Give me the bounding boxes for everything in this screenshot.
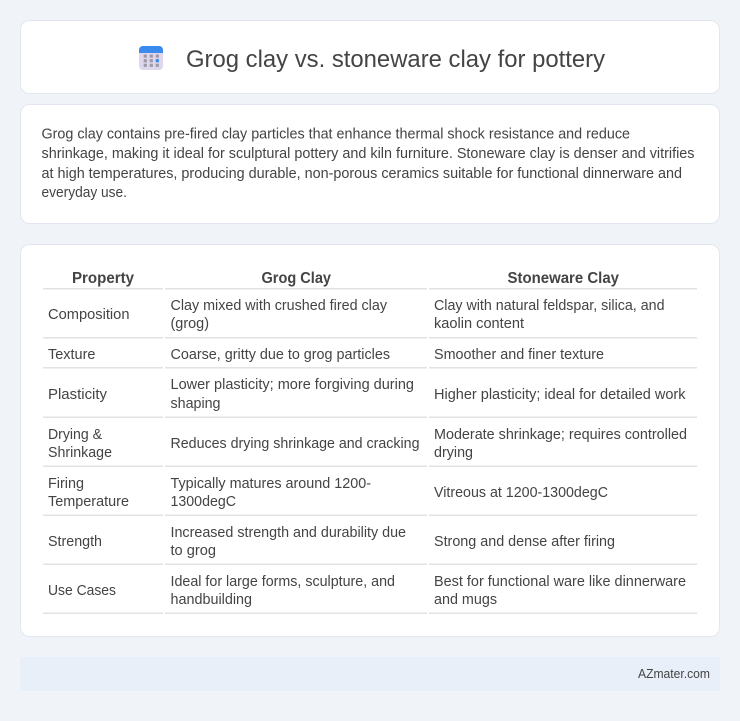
row: texture: Texture (48, 347, 96, 363)
row: firing temperature: Temperature (48, 494, 129, 510)
row: composition (48, 298, 664, 332)
row: drying and shrinkage: drying (434, 445, 473, 461)
row: drying and shrinkage (48, 427, 687, 461)
footer (20, 657, 720, 691)
row: composition: Composition (48, 307, 130, 323)
row: drying and shrinkage: Reduces drying shrinkage and cracking (170, 436, 420, 452)
row: firing temperature: Typically matures around 1200- (170, 476, 371, 492)
table row lines (43, 288, 697, 614)
row: plasticity (48, 377, 686, 412)
row: plasticity: Higher plasticity; ideal for detailed work (434, 387, 686, 403)
row: use cases: handbuilding (170, 592, 252, 608)
table header row: Stoneware Clay (508, 270, 619, 287)
panel: intro text: everyday use. (42, 185, 127, 201)
row: drying and shrinkage: Moderate shrinkage; requires controlled (434, 427, 687, 443)
row: use cases (48, 574, 686, 608)
row: composition: Clay with natural feldspar, silica, and (434, 298, 664, 314)
panel: title card (20, 20, 720, 94)
icon: calendar (139, 46, 163, 70)
panel: intro text: at high temperatures, producing durable, non-porous ceramics suitable for functional dinnerware and (42, 166, 682, 182)
row: plasticity: shaping (170, 396, 220, 412)
row: drying and shrinkage: Shrinkage (48, 445, 112, 461)
table header row (72, 270, 619, 287)
row: firing temperature (48, 476, 608, 510)
row: strength: Strength (48, 534, 102, 550)
footer: AZmater.com (638, 667, 710, 681)
row: texture: Smoother and finer texture (434, 347, 604, 363)
row: strength (48, 525, 615, 559)
row: composition: (grog) (170, 316, 209, 332)
row: strength: Increased strength and durability due (170, 525, 406, 541)
row: composition: kaolin content (434, 316, 524, 332)
row: strength: Strong and dense after firing (434, 534, 615, 550)
row: use cases: Use Cases (48, 583, 116, 599)
title: Grog clay vs. stoneware clay for pottery (186, 46, 605, 73)
row: firing temperature: Vitreous at 1200-1300degC (434, 485, 608, 501)
table header row: Property (72, 270, 134, 287)
panel: intro text: shrinkage, making it ideal for sculptural pottery and kiln furniture. Stoneware clay is denser and vitrifies (42, 146, 694, 162)
table header row: Grog Clay (262, 270, 331, 287)
row: use cases: and mugs (434, 592, 497, 608)
panel: intro text: Grog clay contains pre-fired clay particles that enhance thermal shock resistance and reduce (42, 126, 630, 142)
row: plasticity: Lower plasticity; more forgiving during (170, 377, 414, 393)
panel: comparison table (20, 244, 720, 636)
row: use cases: Best for functional ware like dinnerware (434, 574, 686, 590)
row: plasticity: Plasticity (48, 387, 108, 403)
row: firing temperature: 1300degC (170, 494, 236, 510)
row: use cases: Ideal for large forms, sculpture, and (170, 574, 395, 590)
row: firing temperature: Firing (48, 476, 84, 492)
row: strength: to grog (170, 543, 216, 559)
panel: intro text (20, 104, 720, 224)
row: drying and shrinkage: Drying & (48, 427, 102, 443)
row: texture (48, 347, 604, 363)
row: texture: Coarse, gritty due to grog particles (170, 347, 390, 363)
row: composition: Clay mixed with crushed fired clay (170, 298, 388, 314)
